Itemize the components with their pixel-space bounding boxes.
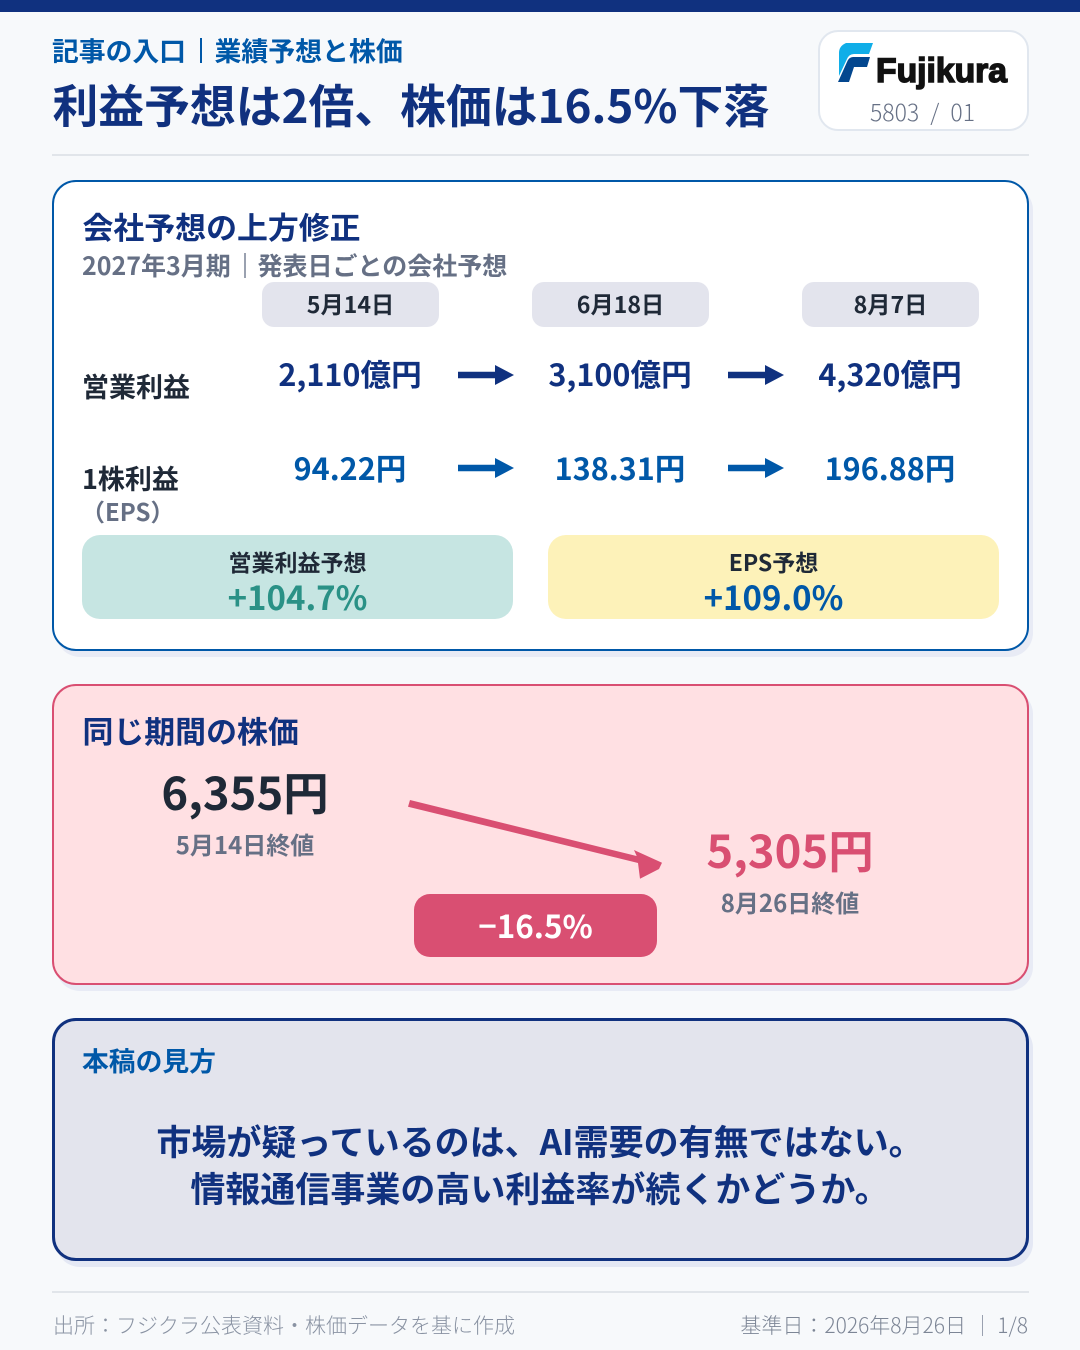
panel heading: 本稿の見方 <box>82 1040 216 1079</box>
date chip 1: 5月14日 <box>307 286 394 320</box>
page number: 1/8 <box>997 1310 1028 1340</box>
arrow <box>458 458 514 478</box>
badge: decline rate <box>414 894 657 957</box>
callout label: EPS予想 <box>729 544 818 578</box>
kicker separator <box>200 38 202 63</box>
value 196.88: 196.88円 <box>825 445 955 489</box>
value 3,100: 3,100億円 <box>548 351 692 395</box>
footer separator <box>982 1315 983 1336</box>
value 4,320: 4,320億円 <box>818 351 962 395</box>
footer divider <box>52 1291 1029 1293</box>
key message: 市場が疑っているのは、AI需要の有無ではない。 <box>156 1115 924 1166</box>
callout: operating profit change <box>82 535 513 619</box>
title: 利益予想は2倍、株価は16.5%下落 <box>52 71 769 137</box>
callout label: 営業利益予想 <box>228 544 366 578</box>
row label: EPS: 1株利益 <box>82 458 179 497</box>
reference date: 基準日：2026年8月26日 <box>740 1310 966 1340</box>
date chip 2: 6月18日 <box>577 286 664 320</box>
date chip 3: 8月7日 <box>854 286 927 320</box>
panel: company forecast <box>52 180 1029 651</box>
panel heading: 会社予想の上方修正 <box>82 203 361 248</box>
date chip 1 <box>262 282 439 327</box>
arrow: price decline <box>408 800 662 879</box>
value 2,110: 2,110億円 <box>278 351 422 395</box>
callout value: +109.0% <box>704 572 843 620</box>
panel heading: 同じ期間の株価 <box>82 707 299 752</box>
top bar <box>0 0 1080 12</box>
kicker right text: 業績予想と株価 <box>214 30 403 69</box>
EPS note: （EPS） <box>81 493 174 528</box>
callout: EPS change <box>548 535 999 619</box>
start date: 5月14日終値 <box>176 826 314 861</box>
value 138.31: 138.31円 <box>555 445 685 489</box>
badge: decline rate: −16.5% <box>478 903 593 948</box>
header kicker <box>52 30 403 69</box>
logo card <box>818 30 1029 131</box>
panel: how to read <box>52 1018 1029 1261</box>
row label: operating profit: 営業利益 <box>82 366 190 405</box>
panel subheading: 2027年3月期 <box>82 247 231 283</box>
date chip 3 <box>802 282 979 327</box>
kicker left text: 記事の入口 <box>52 30 186 69</box>
ticker label: 5803 / 01 <box>870 94 975 128</box>
arrow <box>728 458 784 478</box>
source note: 出所：フジクラ公表資料・株価データを基に作成 <box>53 1310 515 1340</box>
key message: 情報通信事業の高い利益率が続くかどうか。 <box>190 1162 890 1213</box>
end price: 5,305円 <box>706 816 874 882</box>
start price: 6,355円 <box>161 758 329 824</box>
icon: Fujikura logo <box>838 43 1008 90</box>
arrow <box>458 365 514 385</box>
header divider <box>52 154 1029 156</box>
panel: share price <box>52 684 1029 985</box>
icon: Fujikura logo: Fujikura <box>876 52 1008 90</box>
value 94.22: 94.22円 <box>294 445 406 489</box>
arrow <box>728 365 784 385</box>
subheading separator <box>244 253 246 278</box>
end date: 8月26日終値 <box>721 884 859 919</box>
key message <box>156 1115 924 1213</box>
date chip 2 <box>532 282 709 327</box>
panel subheading right: 発表日ごとの会社予想 <box>258 247 507 283</box>
callout value: +104.7% <box>228 572 367 620</box>
